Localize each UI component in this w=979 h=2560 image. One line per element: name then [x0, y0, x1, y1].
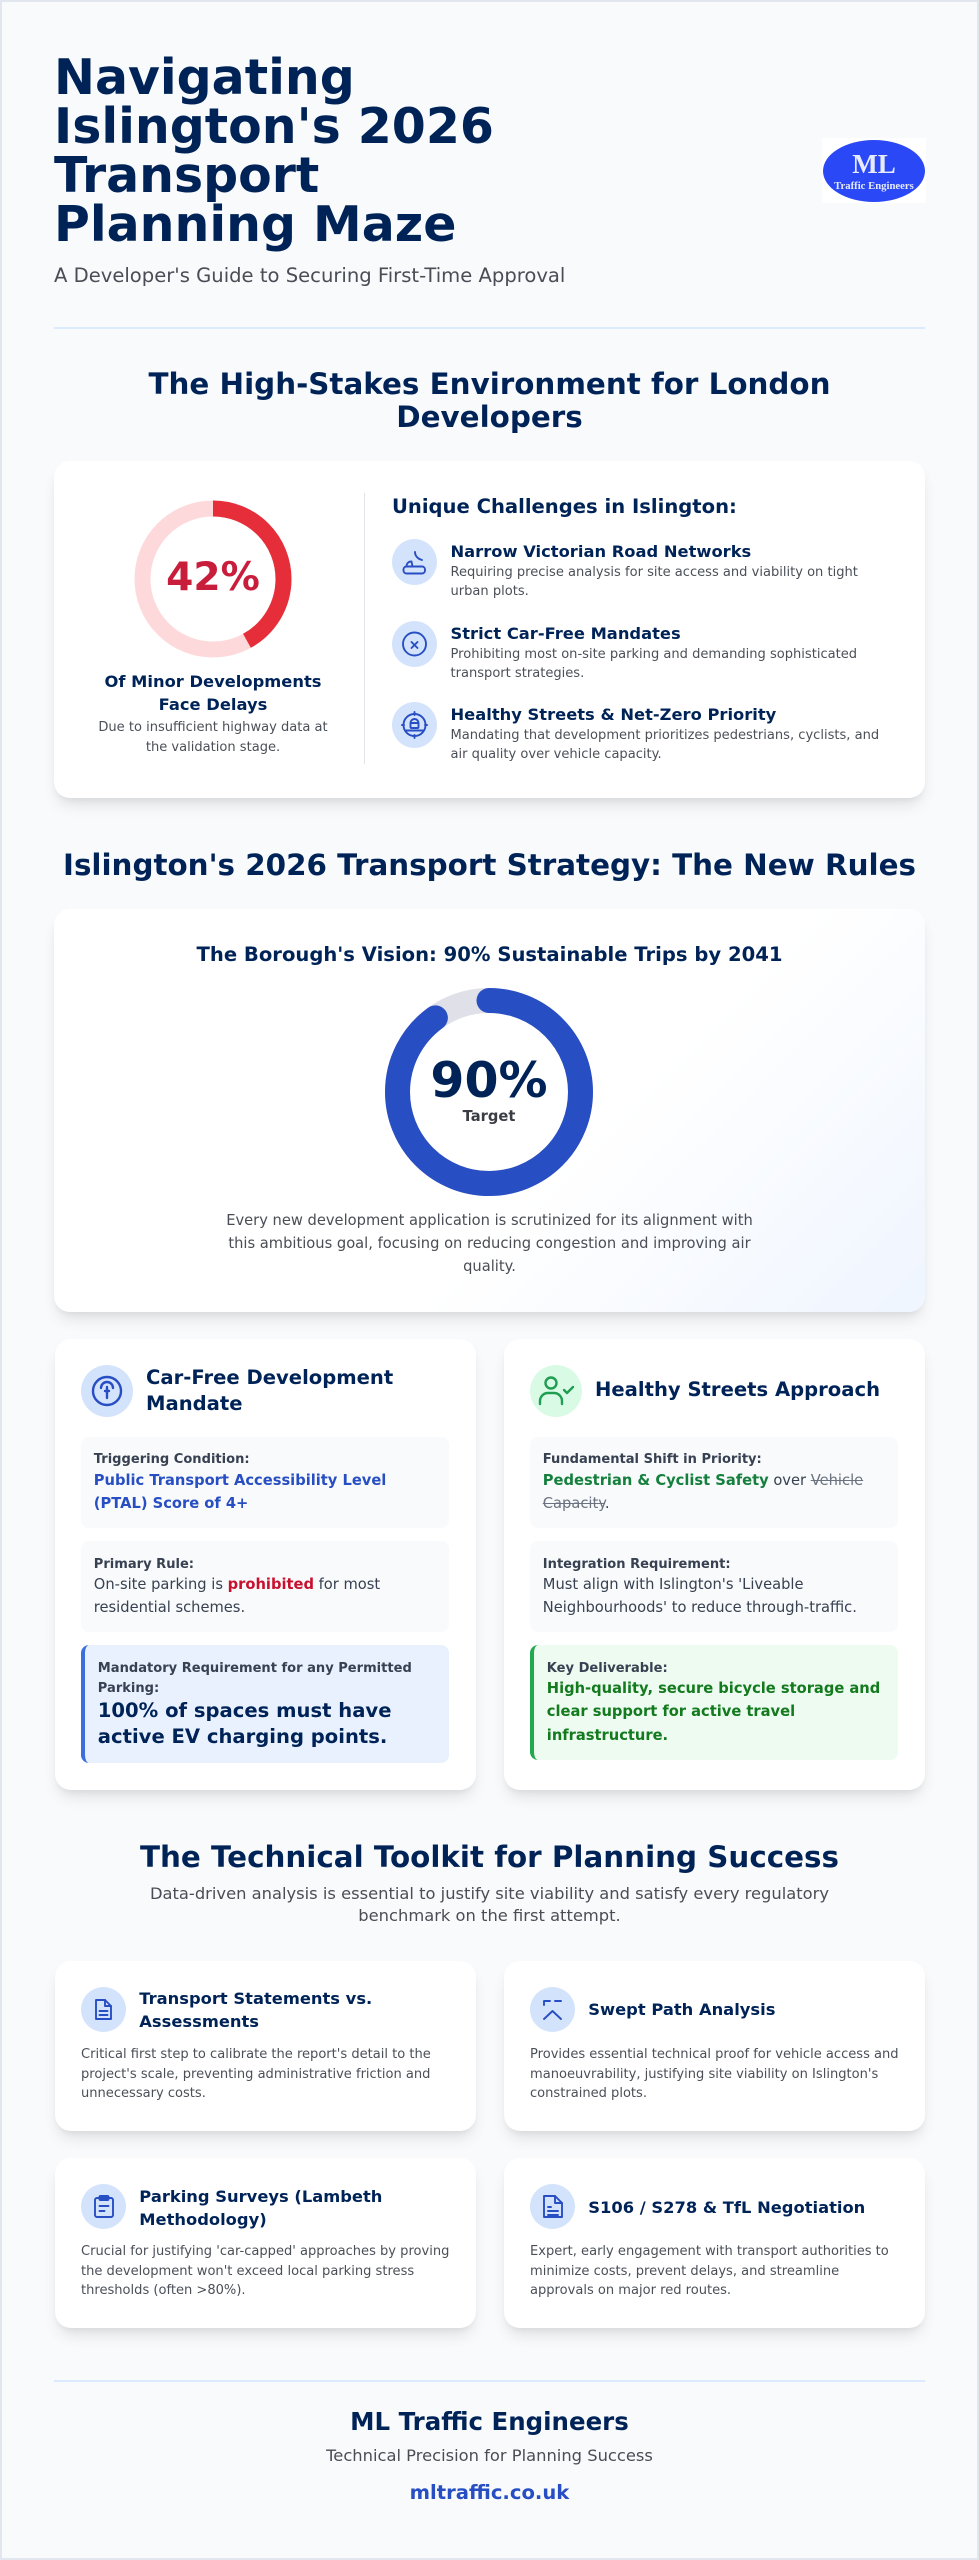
rule: triggering condition: Public Transport Accessibility Level: [94, 1472, 386, 1489]
card text: project's scale, preventing administrative friction and: [81, 2067, 430, 2082]
title: Planning Maze: [54, 196, 456, 253]
rule: primary rule: On-site parking is prohibited for most: [94, 1576, 380, 1593]
toolkit intro: [150, 1884, 829, 1925]
card title: Swept Path Analysis: [588, 2000, 775, 2019]
rule: triggering condition: [81, 1436, 449, 1528]
vision heading: The Borough's Vision: 90% Sustainable Trips by 2041: [197, 943, 782, 966]
header divider: [54, 327, 925, 329]
icon: circle x: [392, 621, 437, 667]
panel: borough vision: [54, 909, 925, 1312]
card title: Car-Free Development: [146, 1366, 393, 1389]
callout: key deliverable: Key Deliverable:: [547, 1661, 668, 1676]
rule: fundamental shift: Pedestrian & Cyclist Safety over Vehicle: [543, 1472, 863, 1489]
challenge title: Narrow Victorian Road Networks: [450, 542, 751, 561]
card text: Critical first step to calibrate the report's detail to the: [81, 2047, 431, 2062]
vision text: Every new development application is scrutinized for its alignment with: [226, 1212, 753, 1229]
card title: [146, 1366, 393, 1415]
card text: [530, 2244, 889, 2298]
card text: [81, 2244, 449, 2298]
vertical divider: [364, 493, 365, 764]
panel: swept path: [504, 1961, 925, 2131]
logo: [822, 138, 926, 203]
challenge text: air quality over vehicle capacity.: [450, 747, 662, 762]
chart: 90% donut: [385, 988, 593, 1196]
icon: clipboard: [81, 2184, 126, 2229]
card title: Transport Statements vs.: [139, 1989, 372, 2008]
icon: legal document: [530, 2184, 575, 2229]
rule: integration: Neighbourhoods' to reduce through-traffic.: [543, 1599, 857, 1616]
title: Transport: [54, 147, 319, 204]
challenge: car-free mandates: [392, 621, 857, 681]
callout: key deliverable: infrastructure.: [547, 1727, 668, 1744]
challenge text: [450, 564, 858, 599]
footer divider: [54, 2380, 925, 2382]
challenge title: Strict Car-Free Mandates: [450, 624, 681, 642]
rule: primary rule: residential schemes.: [94, 1599, 245, 1616]
card text: Crucial for justifying 'car-capped' approaches by proving: [81, 2244, 449, 2259]
icon: document: [81, 1987, 126, 2032]
panel: car-free development mandate: [54, 1339, 476, 1790]
challenge: narrow roads: [392, 539, 858, 599]
card text: manoeuvrability, justifying site viability on Islington's: [530, 2067, 878, 2082]
card title: [139, 1989, 372, 2031]
rule: triggering condition: Triggering Condition:: [94, 1452, 250, 1467]
vision text: this ambitious goal, focusing on reducing congestion and improving air: [228, 1235, 751, 1252]
icon: swept path: [530, 1987, 575, 2032]
vision text: quality.: [463, 1258, 516, 1275]
panel: parking surveys: [54, 2158, 476, 2328]
rule: fundamental shift: Capacity.: [543, 1495, 610, 1512]
rule: primary rule: Primary Rule:: [94, 1557, 194, 1572]
card title: Mandate: [146, 1392, 242, 1415]
card title: Parking Surveys (Lambeth: [139, 2186, 382, 2206]
callout: EV charging: [81, 1645, 449, 1763]
stat note: Due to insufficient highway data at: [98, 720, 328, 735]
title: Navigating: [54, 49, 355, 106]
footer: tagline: Technical Precision for Planning Success: [326, 2446, 653, 2465]
stat label: target: Target: [463, 1108, 515, 1125]
challenge text: transport strategies.: [450, 666, 584, 681]
heading: technical toolkit: The Technical Toolkit for Planning Success: [140, 1840, 839, 1874]
stat note: the validation stage.: [146, 740, 280, 755]
icon: user check: [530, 1365, 582, 1417]
challenge text: urban plots.: [450, 584, 529, 599]
panel: s106 negotiation: [504, 2158, 925, 2328]
heading: high-stakes environment: [148, 367, 831, 434]
stat label: Face Delays: [159, 695, 267, 714]
callout: EV charging: Mandatory Requirement for any Permitted: [98, 1661, 412, 1676]
callout: EV charging: 100% of spaces must have: [98, 1699, 391, 1722]
rule: fundamental shift: Fundamental Shift in Priority:: [543, 1452, 762, 1467]
stat: 90%: 90%: [430, 1052, 548, 1109]
heading: high-stakes environment: The High-Stakes Environment for London: [148, 367, 831, 401]
icon: road: [392, 539, 437, 585]
challenge text: [450, 646, 857, 681]
card text: [530, 2047, 899, 2101]
card title: Methodology): [139, 2210, 267, 2228]
rule: integration: Must align with Islington's 'Liveable: [543, 1576, 804, 1593]
rule: primary rule: [81, 1541, 449, 1632]
logo: ML: [852, 149, 896, 179]
rule: integration: [530, 1541, 898, 1632]
card text: minimize costs, prevent delays, and streamline: [530, 2264, 839, 2279]
stat: 42%: 42%: [166, 555, 260, 600]
title: Islington's 2026: [54, 98, 494, 155]
card title: [139, 2186, 382, 2228]
card text: unnecessary costs.: [81, 2086, 206, 2101]
stat note: [98, 720, 328, 755]
subtitle: A Developer's Guide to Securing First-Time Approval: [54, 264, 565, 287]
card text: [81, 2047, 431, 2101]
logo: Traffic Engineers: [834, 180, 914, 192]
card text: constrained plots.: [530, 2086, 647, 2101]
challenge text: [450, 728, 879, 762]
panel: transport statements: [54, 1961, 476, 2131]
icon: car-free: [81, 1365, 133, 1417]
card text: Expert, early engagement with transport authorities to: [530, 2244, 889, 2259]
card title: Healthy Streets Approach: [595, 1378, 880, 1401]
stat label: Of Minor Developments: [104, 672, 321, 691]
challenge: healthy streets: [392, 702, 879, 762]
challenge text: Mandating that development prioritizes pedestrians, cyclists, and: [450, 728, 879, 742]
callout: key deliverable: [530, 1645, 898, 1760]
rule: integration: Integration Requirement:: [543, 1557, 731, 1572]
panel: high-stakes card: [54, 461, 925, 798]
card text: thresholds (often >80%).: [81, 2283, 246, 2298]
heading: unique challenges: Unique Challenges in Islington:: [392, 495, 737, 518]
challenge title: Healthy Streets & Net-Zero Priority: [450, 705, 776, 724]
stat label: [104, 672, 321, 714]
footer: website: mltraffic.co.uk: [410, 2481, 569, 2504]
card text: Provides essential technical proof for vehicle access and: [530, 2047, 899, 2062]
callout: EV charging: active EV charging points.: [98, 1725, 387, 1748]
callout: key deliverable: clear support for active travel: [547, 1703, 795, 1720]
panel: healthy streets approach: [504, 1339, 925, 1790]
heading: high-stakes environment: Developers: [396, 400, 583, 434]
heading: new rules: Islington's 2026 Transport Strategy: The New Rules: [63, 848, 916, 882]
card title: S106 / S278 & TfL Negotiation: [588, 2198, 865, 2216]
vision text: [226, 1212, 753, 1275]
rule: fundamental shift: [530, 1436, 898, 1528]
card title: Assessments: [139, 2012, 259, 2031]
rule: triggering condition: (PTAL) Score of 4+: [94, 1495, 248, 1512]
card text: the development won't exceed local parking stress: [81, 2264, 414, 2279]
challenge text: Prohibiting most on-site parking and demanding sophisticated: [450, 646, 857, 662]
icon: gear lock: [392, 702, 437, 748]
challenge text: Requiring precise analysis for site access and viability on tight: [450, 564, 858, 580]
callout: key deliverable: High-quality, secure bicycle storage and: [547, 1680, 880, 1697]
callout: EV charging: Parking:: [98, 1681, 159, 1696]
card text: approvals on major red routes.: [530, 2283, 731, 2298]
toolkit intro: benchmark on the first attempt.: [358, 1906, 621, 1925]
footer: company name: ML Traffic Engineers: [350, 2407, 629, 2436]
chart: 42% donut: [134, 500, 292, 658]
toolkit intro: Data-driven analysis is essential to justify site viability and satisfy every regulatory: [150, 1884, 829, 1903]
title: [54, 49, 494, 253]
